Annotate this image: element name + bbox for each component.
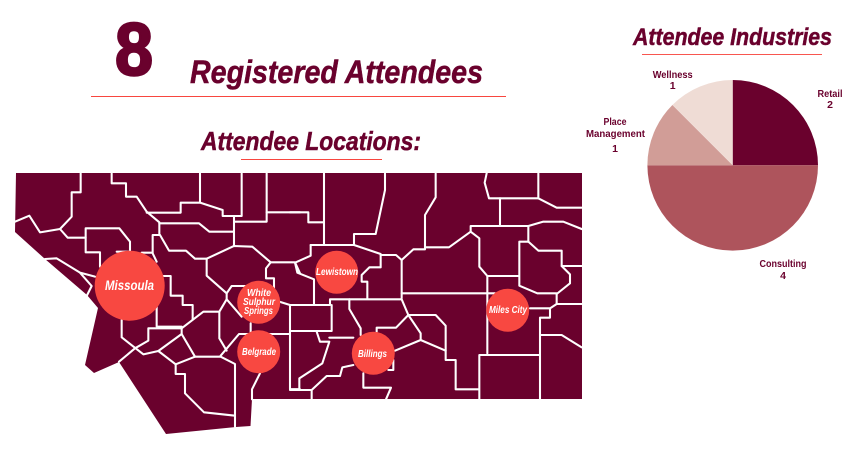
label: Wellness 1: Wellness — [653, 69, 693, 81]
marker: Lewistown: Lewistown — [316, 267, 358, 278]
title underline — [91, 96, 506, 97]
marker: Belgrade — [237, 330, 280, 373]
label: Place Management 1: Management — [586, 128, 645, 140]
heading: Attendee Locations: Attendee Locations: — [200, 126, 421, 156]
county borders west — [15, 173, 300, 427]
county borders east — [290, 173, 582, 399]
marker: Belgrade: Belgrade — [242, 347, 276, 358]
marker: White Sulphur Springs: Springs — [244, 306, 273, 317]
marker: White Sulphur Springs — [237, 281, 280, 324]
label: Retail 2: Retail — [818, 88, 843, 100]
label: Consulting 4 — [760, 258, 806, 282]
marker: Billings: Billings — [358, 349, 387, 360]
label: Place Management 1 — [586, 116, 645, 155]
marker: Billings — [352, 332, 395, 375]
label: Consulting 4: 4 — [780, 270, 786, 282]
big number: total attendees: 8 — [115, 8, 153, 91]
label: Wellness 1 — [653, 69, 693, 92]
marker: Lewistown — [315, 251, 358, 294]
marker: Missoula — [95, 251, 165, 321]
marker: Miles City: Miles City — [489, 305, 527, 316]
pie chart: attendee industries — [647, 80, 818, 251]
marker: Missoula: Missoula — [105, 278, 154, 293]
label: Retail 2: 2 — [827, 99, 833, 111]
locations underline — [241, 159, 382, 160]
label: Place Management 1: 1 — [612, 143, 618, 155]
slice: Wellness — [672, 80, 733, 165]
label: Consulting 4: Consulting — [760, 258, 806, 270]
heading: Attendee Industries: Attendee Industries — [632, 24, 832, 51]
label: Retail 2 — [818, 88, 843, 111]
label: Wellness 1: 1 — [670, 80, 676, 92]
slice: Consulting — [647, 165, 818, 251]
marker: White Sulphur Springs: Sulphur — [243, 297, 276, 308]
label: Place Management 1: Place — [604, 116, 627, 128]
map: Montana counties with attendee locations — [15, 173, 582, 434]
slice: Retail — [733, 80, 818, 165]
title: Registered Attendees: Registered Attendees — [190, 54, 483, 90]
map silhouette — [15, 173, 582, 434]
slice: Place Management — [647, 105, 733, 165]
marker: White Sulphur Springs: White — [247, 288, 271, 299]
industries underline — [642, 54, 822, 55]
marker: Miles City — [486, 289, 529, 332]
